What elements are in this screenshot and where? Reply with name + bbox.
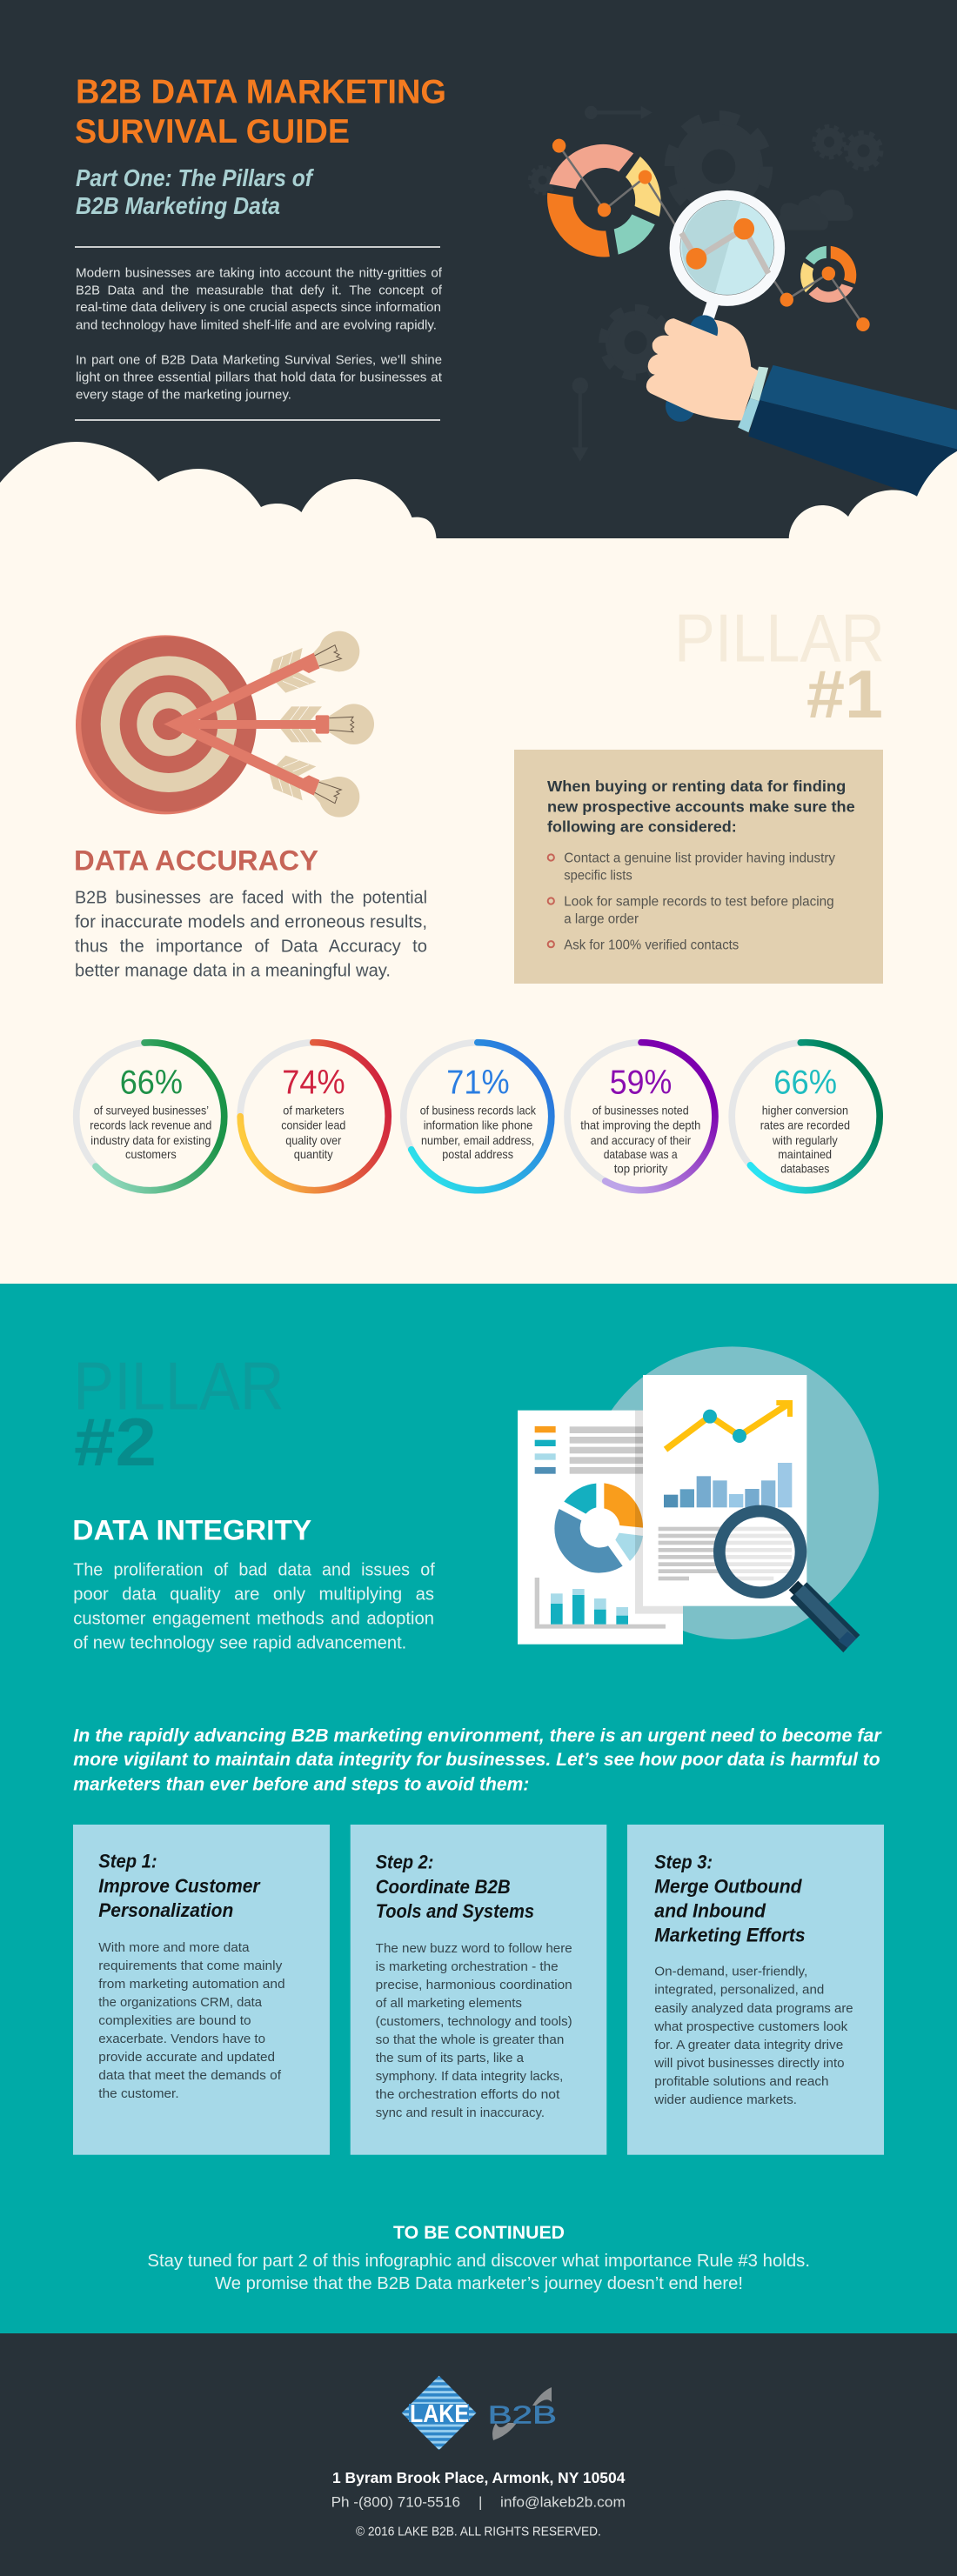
title: SURVIVAL GUIDE	[75, 113, 350, 150]
list: considerations bullets	[548, 851, 835, 953]
heading: step 3: Merge Outbound	[654, 1876, 802, 1898]
logo: Lake B2B: B2B	[488, 2402, 557, 2430]
icon: hand	[646, 318, 759, 420]
icon: magnifier handle	[666, 315, 719, 422]
stat ring: 71% business records: 71%	[446, 1064, 510, 1101]
stat ring: 66% conversion rates: with regularly	[772, 1133, 838, 1147]
text block: header introduction: Modern businesses are taking into account the nitty-gritties of	[76, 265, 443, 280]
text block: header introduction: every stage of the marketing journey.	[76, 388, 291, 403]
text block: step 2 body: the sum of its parts, like a	[376, 2051, 525, 2065]
text block: step 3 body: easily analyzed data programs are	[654, 2001, 853, 2016]
stat ring: 74% marketers: consider lead	[281, 1118, 345, 1132]
stat ring: 59% businesses	[567, 1043, 715, 1191]
stat ring: 66% conversion rates: databases	[780, 1162, 829, 1176]
text block: step 1 body: data that meet the demands of	[98, 2068, 282, 2083]
stat ring: 66% conversion rates: maintained	[778, 1147, 832, 1161]
stat ring: 71% business records: number, email address,	[421, 1133, 534, 1147]
heading: step 1: Improve Customer	[98, 1875, 261, 1897]
title: B2B DATA MARKETING	[76, 74, 446, 111]
text block: step 2 body: sync and result in inaccuracy.	[376, 2106, 545, 2120]
text block: step 3 body: profitable solutions and reach	[654, 2074, 829, 2089]
icon: lower arrow	[164, 719, 359, 818]
heading: considerations: following are considered:	[547, 818, 737, 836]
stat ring: 59% businesses: 59%	[610, 1064, 672, 1101]
subtitle	[76, 164, 314, 219]
panel: left report sheet	[518, 1411, 683, 1645]
heading: step 3: Marketing Efforts	[654, 1924, 806, 1945]
text block: step 2 body: precise, harmonious coordination	[376, 1978, 572, 1992]
text block: data accuracy description: for inaccurate models and erroneous results,	[75, 912, 427, 932]
chart: report stacked bars	[535, 1578, 666, 1629]
text block: step 2 body: is marketing orchestration - the	[376, 1959, 559, 1974]
heading: step 3: and Inbound	[654, 1899, 766, 1921]
heading: step 3: Step 3:	[654, 1851, 713, 1872]
heading: data integrity: DATA INTEGRITY	[72, 1514, 312, 1546]
text block: step 2 body	[376, 1941, 572, 2120]
decorative clouds	[0, 442, 957, 557]
text block: to be continued: We promise that the B2B Data marketer’s journey doesn’t end here!	[215, 2273, 743, 2293]
text block: data integrity description: customer engagement methods and adoption	[73, 1609, 434, 1629]
stat ring: 71% business records: information like phone	[424, 1118, 532, 1132]
text block: data integrity description: of new technology see rapid advancement.	[73, 1633, 406, 1653]
icon: bullseye	[76, 635, 257, 814]
stat ring: 66% conversion rates: rates are recorded	[760, 1118, 850, 1132]
stat ring: 74% marketers: 74%	[282, 1064, 345, 1101]
icon: upper arrow	[164, 631, 359, 729]
text block: data integrity description: The proliferation of bad data and issues of	[73, 1560, 435, 1580]
stat ring: 66% conversion rates	[732, 1043, 880, 1191]
text block: step 2 body: The new buzz word to follow here	[376, 1941, 572, 1956]
stat ring: 71% business records: postal address	[442, 1147, 513, 1161]
panel: pillar 2 background	[0, 1284, 957, 2333]
text block: step 2 body: the orchestration efforts do not	[376, 2087, 560, 2102]
stat ring: 66% surveyed businesses: 66%	[120, 1064, 183, 1101]
stat ring: 66% conversion rates: higher conversion	[762, 1104, 848, 1118]
text block: pillar 2 intro	[73, 1726, 883, 1794]
logo: Lake B2B: LAKE	[410, 2400, 469, 2428]
text block: pillar 2 intro: more vigilant to maintain data integrity for businesses. Let’s see how poor data is harmful to	[73, 1750, 880, 1770]
logo: Lake B2B	[402, 2376, 557, 2450]
icon: sleeve	[738, 365, 957, 497]
heading: step 2	[376, 1852, 534, 1922]
icon: magnifying glass	[670, 190, 785, 321]
text lines placeholder	[659, 1527, 792, 1580]
text block: header introduction: real-time data delivery is one crucial aspects since information	[76, 300, 441, 315]
text block: step 2 body: symphony. If data integrity lacks,	[376, 2069, 563, 2084]
text block: to be continued: TO BE CONTINUED	[393, 2222, 565, 2243]
stat ring: 74% marketers: quality over	[285, 1133, 342, 1147]
heading: step 2: Tools and Systems	[376, 1900, 534, 1922]
illustration: reports under magnifier	[518, 1346, 879, 1652]
illustration: target with arrows	[76, 631, 374, 818]
panel: pillar 1 background	[0, 538, 957, 1284]
stat ring: 71% business records	[404, 1043, 552, 1191]
chart: trend line	[666, 1400, 793, 1450]
subtitle: B2B Marketing Data	[76, 192, 280, 219]
text block: data accuracy description	[75, 888, 427, 981]
text block: pillar 2 intro: In the rapidly advancing B2B marketing environment, there is an urgent need to become far	[73, 1726, 883, 1746]
stat ring: 66% surveyed businesses	[77, 1043, 224, 1191]
text block: header introduction: light on three essential pillars that hold data for businesses at	[76, 370, 443, 384]
heading: pillar 1: PILLAR	[674, 600, 885, 677]
text block: footer contact: |	[478, 2494, 482, 2511]
panel: step 1	[73, 1825, 330, 2155]
illustration: hand holding magnifier over charts	[530, 106, 957, 497]
chart: report donut	[554, 1483, 643, 1573]
text block: step 1 body: complexities are bound to	[98, 2013, 251, 2028]
heading: pillar 1	[674, 600, 885, 732]
heading: considerations: When buying or renting data for finding	[547, 777, 846, 795]
text block: step 1 body: With more and more data	[98, 1940, 250, 1955]
text block: step 3 body: On-demand, user-friendly,	[654, 1965, 807, 1979]
stat ring: 66% surveyed businesses: records lack revenue and	[90, 1118, 211, 1132]
text block: step 3 body: what prospective customers look	[653, 2019, 848, 2034]
heading: pillar 2: #2	[74, 1404, 157, 1480]
text block: footer contact: Ph -(800) 710-5516	[331, 2494, 460, 2511]
stat ring: 66% surveyed businesses: customers	[125, 1147, 177, 1161]
heading: considerations: new prospective accounts make sure the	[547, 797, 855, 815]
stat ring: 59% businesses: and accuracy of their	[591, 1133, 691, 1147]
text block: data accuracy description: better manage data in a meaningful way.	[75, 961, 391, 981]
stat ring: 74% marketers	[240, 1043, 388, 1191]
heading: pillar 2	[73, 1348, 284, 1480]
text block: data accuracy description: thus the importance of Data Accuracy to	[75, 937, 427, 957]
heading: considerations	[547, 777, 855, 836]
text block: step 2 body: so that the whole is greater than	[376, 2032, 564, 2047]
list: considerations bullets: Ask for 100% verified contacts	[564, 938, 740, 953]
panel: right report sheet	[643, 1375, 806, 1606]
text block: step 1 body: the customer.	[98, 2086, 179, 2101]
text block: step 3 body: will pivot businesses directly into	[653, 2056, 845, 2071]
stat ring: 59% businesses: of businesses noted	[592, 1104, 689, 1118]
heading: step 3	[654, 1851, 806, 1945]
text block: step 1 body: exacerbate. Vendors have to	[98, 2032, 265, 2046]
text block: data integrity description	[73, 1560, 435, 1653]
stat ring: 59% businesses: database was a	[604, 1147, 678, 1161]
icon: backdrop circle	[586, 1346, 879, 1639]
title	[75, 74, 446, 150]
text block: step 3 body: integrated, personalized, and	[654, 1983, 824, 1998]
heading: step 2: Step 2:	[376, 1852, 433, 1873]
heading: step 1	[98, 1851, 261, 1921]
text block: header introduction: B2B Data and the measurable that defy it. The concept of	[76, 284, 443, 297]
panel: buying considerations	[514, 750, 883, 984]
chart: blue bars	[664, 1463, 792, 1507]
text block: pillar 2 intro: marketers than ever before and steps to avoid them:	[73, 1774, 529, 1794]
text block: data integrity description: poor data quality are only multiplying as	[73, 1585, 434, 1605]
heading: pillar 2: PILLAR	[73, 1348, 284, 1425]
text block: to be continued	[147, 2222, 810, 2293]
text block: header introduction	[76, 265, 443, 403]
icon: middle arrow	[164, 704, 374, 744]
text block: step 1 body	[98, 1940, 285, 2101]
stat ring: 71% business records: of business records lack	[420, 1104, 537, 1118]
list: considerations bullets: Look for sample records to test before placing	[564, 895, 834, 910]
icon: background gears and arrows	[530, 106, 881, 462]
panel: step 2	[351, 1825, 606, 2155]
stat ring: 59% businesses: that improving the depth	[580, 1118, 700, 1132]
stat ring: 66% surveyed businesses: of surveyed businesses’	[94, 1104, 209, 1118]
text block: step 3 body: wider audience markets.	[653, 2092, 797, 2107]
text block: step 1 body: the organizations CRM, data	[98, 1995, 263, 2010]
heading: pillar 1: #1	[806, 656, 883, 732]
decorative sheet shadow	[635, 1411, 683, 1614]
panel: step 3	[627, 1825, 884, 2155]
list: considerations bullets: a large order	[564, 912, 639, 927]
text block: to be continued: Stay tuned for part 2 of this infographic and discover what importance Rule #3 holds.	[147, 2251, 810, 2271]
text block: footer contact: 1 Byram Brook Place, Armonk, NY 10504	[332, 2469, 626, 2486]
stat ring: 74% marketers: quantity	[294, 1147, 333, 1161]
stat ring: 66% conversion rates: 66%	[773, 1064, 837, 1101]
stat ring: 59% businesses: top priority	[614, 1162, 667, 1176]
text block: step 3 body	[653, 1965, 853, 2107]
icon: report magnifier	[719, 1511, 860, 1652]
text block: step 2 body: (customers, technology and tools)	[376, 2014, 572, 2029]
heading: step 1: Personalization	[98, 1899, 233, 1921]
stat ring: 74% marketers: of marketers	[283, 1104, 345, 1118]
text block: step 1 body: provide accurate and updated	[98, 2050, 275, 2065]
text block: data accuracy description: B2B businesses are faced with the potential	[75, 888, 427, 908]
text block: header introduction: In part one of B2B Data Marketing Survival Series, we’ll shine	[76, 352, 442, 367]
panel: footer background	[0, 2333, 957, 2576]
chart: small donut	[800, 246, 856, 303]
text block: footer contact: info@lakeb2b.com	[500, 2494, 626, 2511]
subtitle: Part One: The Pillars of	[76, 164, 314, 191]
list: considerations bullets: Contact a genuine list provider having industry	[564, 851, 835, 866]
chart: line with orange nodes	[552, 139, 870, 331]
heading: step 1: Step 1:	[98, 1851, 157, 1872]
text block: step 1 body: from marketing automation and	[98, 1977, 285, 1992]
text block: step 1 body: requirements that come mainly	[98, 1959, 283, 1973]
stat ring: 66% surveyed businesses: industry data for existing	[90, 1133, 211, 1147]
chart: large donut	[547, 144, 661, 257]
list: considerations bullets: specific lists	[564, 869, 632, 884]
panel: header background	[0, 0, 957, 538]
heading: step 2: Coordinate B2B	[376, 1876, 511, 1898]
heading: data accuracy: DATA ACCURACY	[74, 844, 318, 877]
text block: step 2 body: of all marketing elements	[376, 1996, 522, 2011]
text block: footer contact: © 2016 LAKE B2B. ALL RIGHTS RESERVED.	[356, 2525, 601, 2539]
text block: footer contact	[331, 2469, 626, 2539]
text block: step 3 body: for. A greater data integrity drive	[654, 2038, 843, 2052]
text block: header introduction: and technology have limited shelf-life and are evolving rapidly.	[76, 317, 437, 332]
